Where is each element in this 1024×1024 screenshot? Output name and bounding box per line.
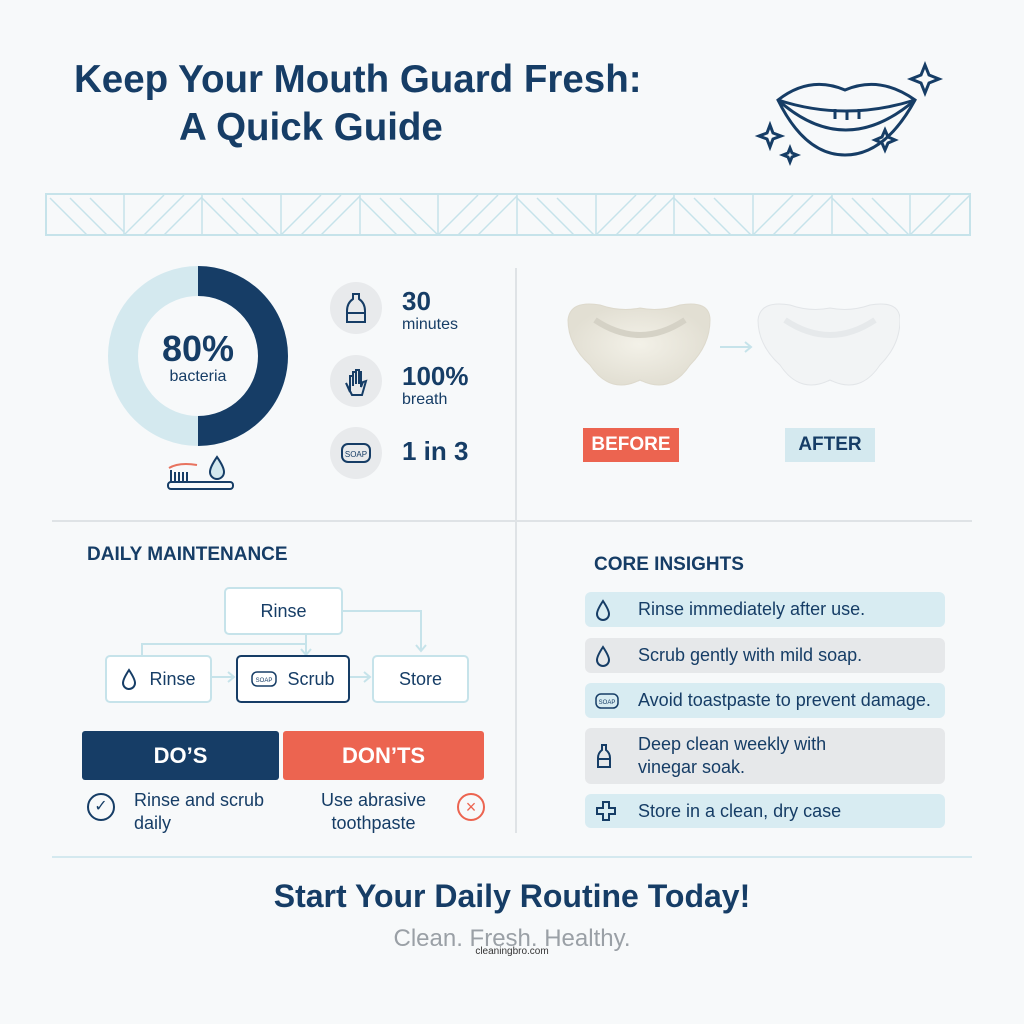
heading: core insights: CORE INSIGHTS — [594, 554, 744, 575]
don'ts panel: toothpaste — [331, 813, 416, 833]
don'ts panel: × — [466, 797, 476, 817]
do's panel — [82, 731, 279, 833]
before/after mouth guards — [568, 304, 900, 462]
flowchart: Store — [399, 668, 442, 688]
flowchart: Scrub — [287, 668, 335, 688]
stats list: minutes — [402, 316, 458, 333]
donut chart 80%: bacteria — [170, 368, 226, 385]
donut chart 80% — [108, 266, 288, 446]
icon: toothbrush and drop — [167, 455, 234, 490]
tagline: Clean. Fresh. Healthy. — [394, 925, 630, 952]
insights list: Rinse immediately after use. — [638, 599, 865, 619]
don'ts panel — [283, 731, 485, 833]
do's panel: Rinse and scrub — [134, 790, 264, 810]
don'ts panel: DON’TS — [342, 742, 425, 768]
insights list: Deep clean weekly with — [638, 734, 826, 754]
insights list: Avoid toastpaste to prevent damage. — [638, 690, 931, 710]
stats list: breath — [402, 391, 447, 408]
stats list: 1 in 3 — [402, 436, 468, 466]
footer call to action: Start Your Daily Routine Today! — [274, 878, 750, 914]
label: before — [583, 428, 679, 462]
do's panel: ✓ — [94, 798, 108, 815]
heading: daily maintenance: DAILY MAINTENANCE — [87, 544, 288, 565]
insights list: Scrub gently with mild soap. — [638, 645, 862, 665]
donut chart 80%: 80% — [162, 328, 234, 369]
icon: smile with sparkles — [754, 61, 943, 166]
insights list: Store in a clean, dry case — [638, 800, 841, 820]
stats list — [330, 282, 468, 479]
insights list: vinegar soak. — [638, 757, 745, 777]
flowchart — [105, 587, 469, 703]
stats list: SOAP — [345, 450, 367, 459]
label: after — [785, 428, 875, 462]
flowchart: Rinse — [260, 600, 307, 620]
flowchart: Rinse — [149, 668, 196, 688]
title: A Quick Guide — [179, 106, 443, 149]
label: after: AFTER — [798, 434, 862, 455]
title — [74, 58, 642, 149]
watermark: cleaningbro.com — [475, 946, 549, 957]
stats list: 30 — [402, 286, 431, 316]
decorative pattern band — [45, 193, 971, 236]
dividers — [515, 268, 517, 833]
insights list — [585, 592, 945, 828]
insights list: SOAP — [599, 700, 615, 706]
do's panel: daily — [134, 813, 171, 833]
don'ts panel: Use abrasive — [321, 790, 426, 810]
label: before: BEFORE — [591, 434, 671, 455]
stats list: 100% — [402, 361, 468, 391]
title: Keep Your Mouth Guard Fresh: — [74, 58, 642, 101]
do's panel: DO’S — [154, 742, 207, 768]
flowchart: SOAP — [256, 678, 273, 684]
